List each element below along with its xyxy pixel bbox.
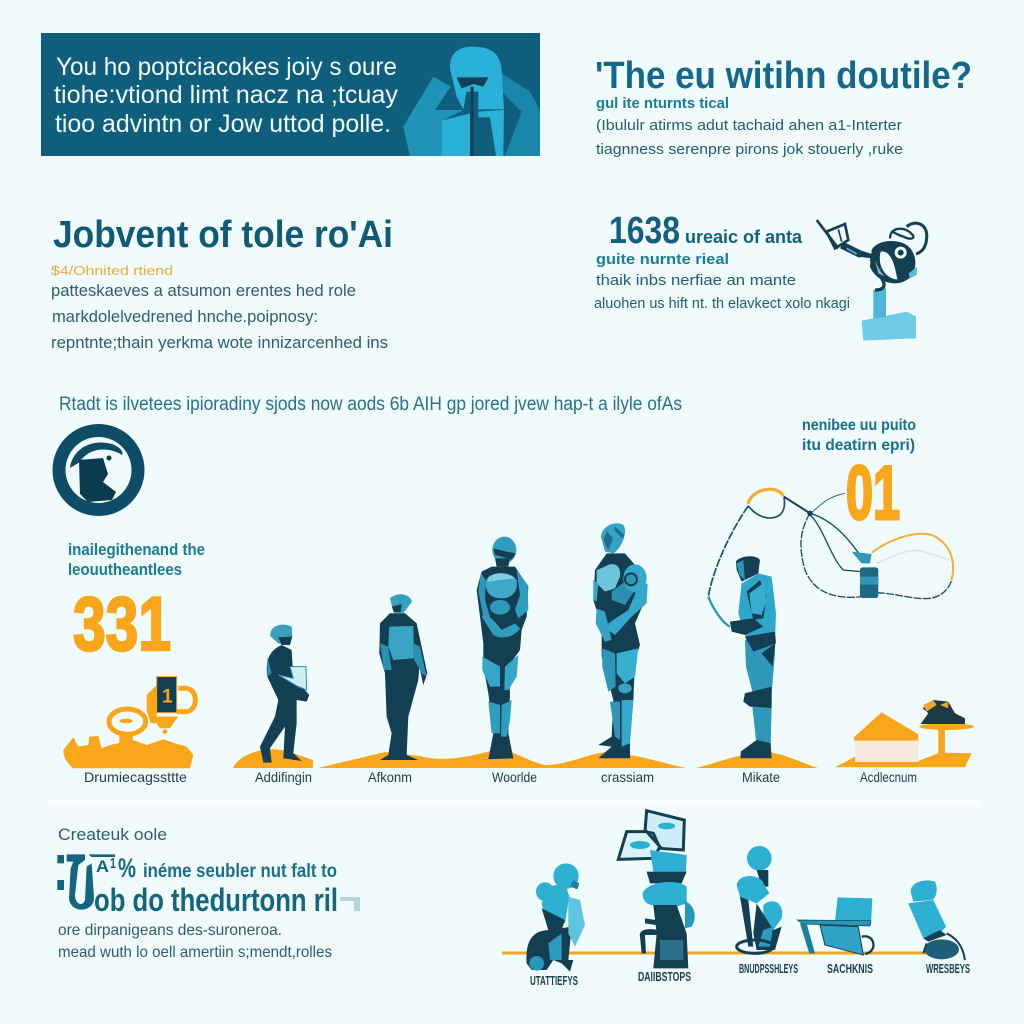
text block left	[51, 281, 388, 352]
labels: figure row: Mikate	[742, 769, 780, 785]
stat: left 331: inailegithenand the	[68, 540, 205, 559]
labels: bottom robots: SACHKNIS	[827, 961, 873, 976]
labels: bottom robots: WRESBEYS	[926, 961, 970, 976]
ground humps	[233, 748, 818, 768]
text block: bottom left stat: inéme seubler nut falt to	[143, 861, 337, 882]
banner text: tiohe:vtiond limt nacz na ;tcuay	[54, 81, 398, 109]
heading: top right: 'The eu witihn doutile?	[595, 55, 972, 97]
labels: figure row: Acdlecnum	[860, 769, 917, 785]
baseline: orange line	[502, 952, 927, 954]
labels: figure row: Afkonm	[368, 769, 412, 785]
banner text: tioo advintn or Jow uttod polle.	[55, 110, 391, 138]
text block top right	[596, 95, 903, 158]
labels: figure row: Woorlde	[492, 769, 537, 785]
labels: figure row	[255, 769, 917, 785]
text block: bottom left stat: 1	[110, 855, 116, 872]
text block top right: tiagnness serenpre pirons jok stouerly ,ruke	[596, 141, 903, 158]
text block: bottom left stat: A	[96, 857, 109, 876]
icon: hut and table	[835, 700, 974, 767]
text block left: repntnte;thain yerkma wote innizarcenhed ins	[51, 333, 388, 352]
icon: orange cluster: 1	[162, 687, 173, 708]
figure 1: walking person	[260, 625, 309, 763]
text block: bottom left stat: ore dirpanigeans des-suroneroa.	[58, 922, 282, 939]
figure 2: person in vest	[379, 594, 427, 760]
stat: 1638: aluohen us hift nt. th elavkect xolo nkagi	[594, 295, 850, 312]
diagram: cable wires	[708, 489, 953, 627]
bottom robot 1	[526, 863, 585, 972]
callout: right stat 01	[802, 417, 916, 536]
stat: left 331	[68, 540, 205, 667]
banner text: You ho poptciacokes joiy s oure	[56, 53, 397, 81]
text block: bottom left stat: mead wuth lo oell amertiin s;mendt,rolles	[58, 944, 332, 961]
callout: right stat 01: 01	[846, 451, 900, 536]
stat: left 331: leouutheantlees	[68, 560, 182, 579]
text block: bottom left stat: %	[118, 853, 136, 883]
text block top right: gul ite nturnts tical	[596, 95, 729, 112]
panel: header banner	[41, 33, 540, 156]
stat: left 331: 331	[73, 582, 171, 667]
icon: round head badge	[52, 424, 144, 516]
subheading: middle: Rtadt is ilvetees ipioradiny sjods now aods 6b AIH gp jored jvew hap-t a ilyle ofAs	[59, 394, 682, 415]
stat: 1638: 1638	[609, 210, 680, 252]
orange subheading left: $4/Ohnited rtiend	[51, 263, 173, 278]
figure 4: tall robot	[593, 523, 648, 758]
stat: 1638: thaik inbs nerfiae an mante	[596, 272, 796, 289]
text block: bottom left stat	[57, 825, 360, 961]
text block left: markdolelvedrened hnche.poipnosy:	[52, 307, 318, 326]
labels: bottom robots: BNUDPSSHLEYS	[739, 961, 798, 976]
icon: robot arm	[817, 220, 927, 341]
banner text	[54, 53, 398, 138]
stat: 1638: guite nurnte rieal	[596, 251, 729, 268]
icon: orange cluster	[63, 677, 195, 768]
callout: right stat 01: nenibee uu puito	[802, 417, 916, 434]
stat: 1638: ureaic of anta	[685, 227, 803, 247]
text block top right: (Ibululr atirms adut tachaid ahen a1-Interter	[596, 117, 902, 134]
callout: right stat 01: itu deatirn epri)	[802, 437, 915, 454]
stat: 1638	[594, 210, 850, 312]
labels: figure row: crassiam	[601, 769, 654, 785]
icon: hooded figure	[403, 47, 540, 156]
figure 3: robot	[477, 537, 528, 759]
labels: figure row: Addifingin	[255, 769, 312, 785]
bottom robot 5	[908, 880, 965, 960]
big merged 70 numeral	[57, 854, 115, 910]
bottom laptop on desk	[797, 897, 873, 955]
figure 5: robot with cable	[730, 556, 776, 758]
bottom robot 3	[737, 846, 782, 953]
labels: bottom robots: UTATTIEFYS	[530, 973, 578, 988]
text block left: patteskaeves a atsumon erentes hed role	[51, 281, 356, 300]
heading: job title left: Jobvent of tole ro'Ai	[53, 214, 393, 256]
labels: bottom robots	[530, 961, 970, 988]
labels: bottom robots: DAIIBSTOPS	[638, 969, 691, 984]
bottom robot 2 with screens	[618, 811, 695, 968]
label: cluster: Drumiecagssttte	[84, 769, 187, 785]
text block: bottom left stat: ob do thedurtonn ril	[94, 882, 338, 918]
text block: bottom left stat: Createuk oole	[58, 825, 167, 844]
